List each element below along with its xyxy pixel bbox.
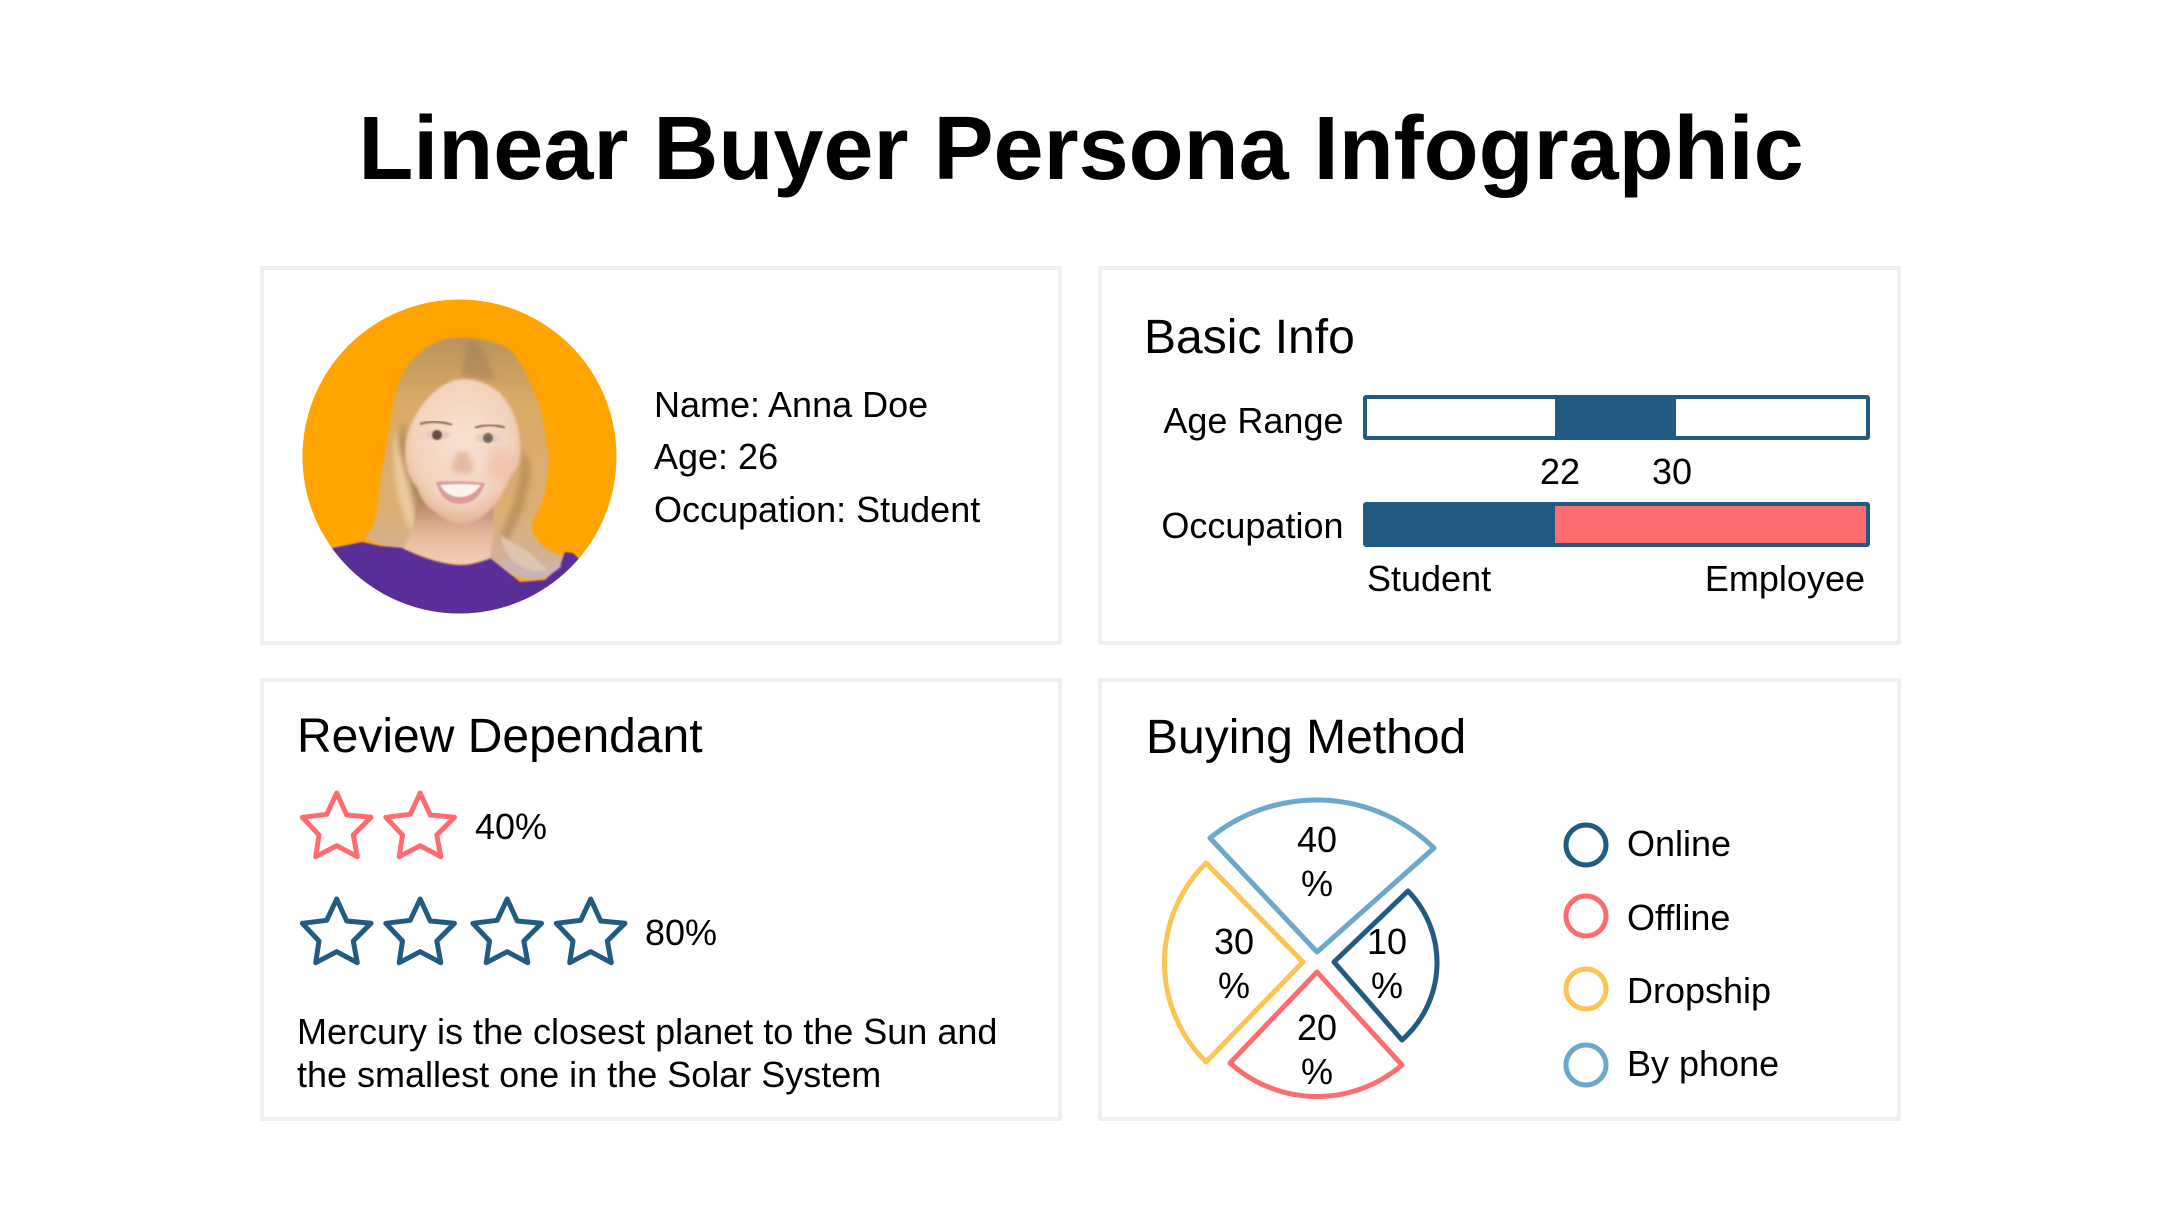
nose: [450, 452, 474, 474]
rating: four stars: [302, 899, 625, 963]
legend item: offline: Offline: [1627, 897, 1730, 938]
slice: by phone 40%: %: [1301, 863, 1333, 904]
age range bar: Age Range: [1163, 400, 1344, 441]
neck: [403, 505, 493, 565]
brows: [420, 422, 452, 425]
panel: basic info: [1100, 268, 1899, 643]
slice: dropship 30%: %: [1218, 965, 1250, 1006]
portrait photo: [302, 300, 616, 614]
description: Mercury is the closest planet to the Sun and: [297, 1011, 997, 1052]
hair: [364, 337, 566, 580]
mouth: [436, 481, 485, 504]
face: [405, 379, 520, 524]
slice: online 10%: 10: [1367, 921, 1407, 962]
slice: offline 20%: [1230, 972, 1402, 1097]
slice: online 10%: [1334, 891, 1437, 1040]
slice: dropship 30%: 30: [1214, 921, 1254, 962]
description: the smallest one in the Solar System: [297, 1054, 881, 1095]
occupation bar: Employee: [1705, 558, 1865, 599]
rating: two stars: [302, 793, 454, 857]
occupation bar: Student: [1367, 558, 1491, 599]
legend item: offline: [1566, 896, 1730, 938]
hair shadows: [462, 340, 494, 380]
title: Linear Buyer Persona Infographic: [358, 99, 1804, 199]
cheeks: [487, 449, 513, 481]
heading: basic info: Basic Info: [1144, 311, 1355, 364]
shirt: [332, 541, 580, 614]
pie chart: [1164, 800, 1437, 1097]
legend item: online: [1566, 823, 1731, 865]
slice: dropship 30%: [1164, 863, 1303, 1062]
occupation bar: [1161, 504, 1868, 599]
age range bar: 22: [1540, 451, 1580, 492]
panel: profile: [262, 268, 1060, 643]
description: [297, 1011, 997, 1095]
profile details: Age: 26: [654, 436, 778, 477]
profile details: Name: Anna Doe: [654, 384, 928, 425]
slice: online 10%: %: [1371, 965, 1403, 1006]
slice: offline 20%: %: [1301, 1051, 1333, 1092]
label: 80 percent: 80%: [645, 912, 717, 953]
legend item: dropship: [1566, 969, 1771, 1011]
label: 40 percent: 40%: [475, 806, 547, 847]
slice: by phone 40%: [1210, 800, 1434, 952]
slice: by phone 40%: 40: [1297, 819, 1337, 860]
profile details: Occupation: Student: [654, 489, 980, 530]
panel: review dependant: [262, 680, 1060, 1119]
slice: offline 20%: 20: [1297, 1007, 1337, 1048]
legend item: by phone: By phone: [1627, 1043, 1779, 1084]
panel: buying method: [1100, 680, 1899, 1119]
heading: review dependant: Review Dependant: [297, 710, 703, 763]
eyes: [424, 430, 450, 440]
profile details: [654, 384, 980, 530]
occupation bar: Occupation: [1161, 505, 1344, 546]
heading: buying method: Buying Method: [1146, 711, 1466, 764]
legend: [1566, 823, 1779, 1085]
age range bar: [1163, 397, 1868, 492]
legend item: by phone: [1566, 1043, 1779, 1085]
legend item: online: Online: [1627, 823, 1731, 864]
age range bar: 30: [1652, 451, 1692, 492]
legend item: dropship: Dropship: [1627, 970, 1771, 1011]
